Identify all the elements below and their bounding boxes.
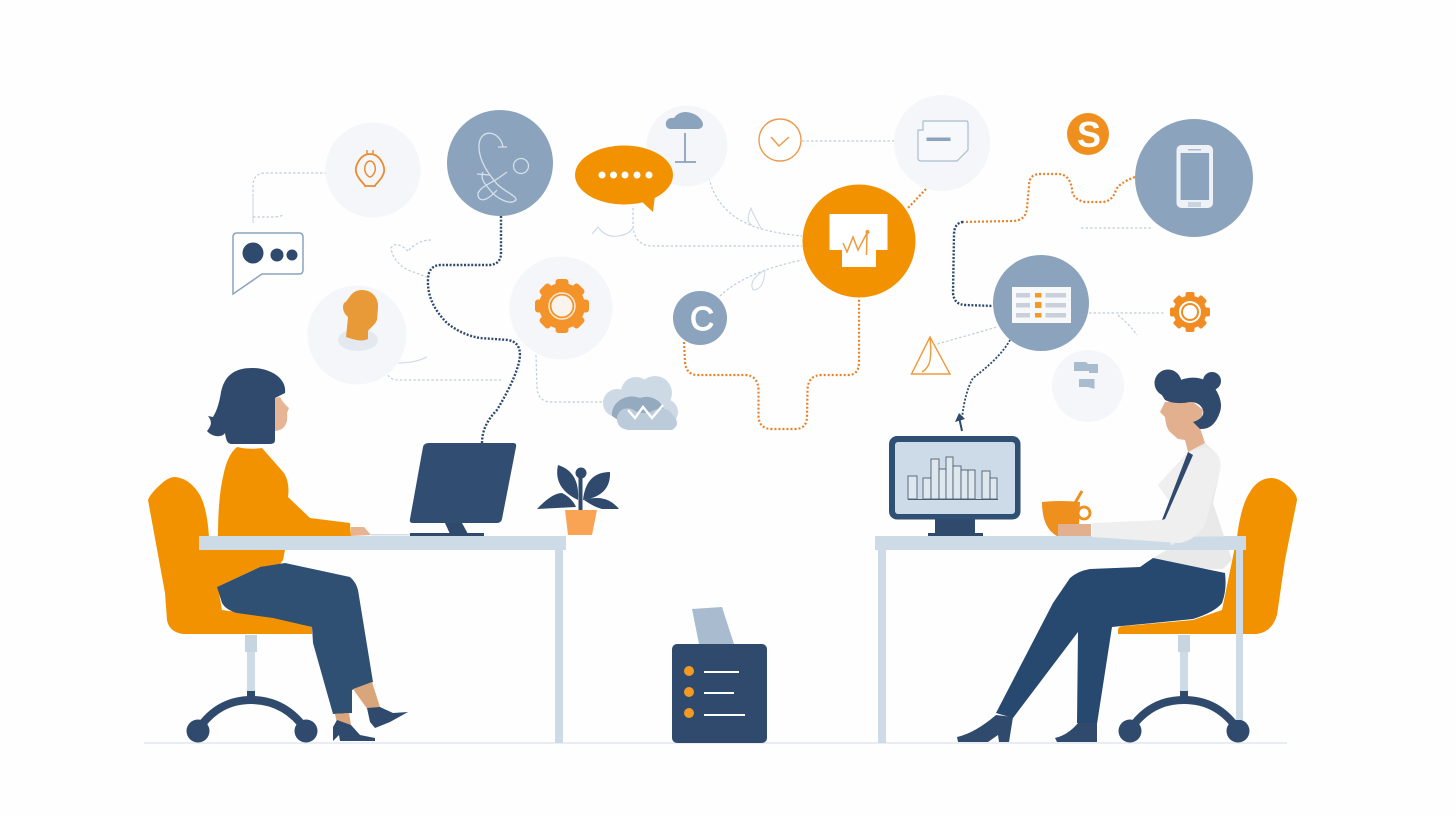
right chair	[1118, 478, 1297, 742]
icon: smartphone circle	[1135, 119, 1253, 237]
coffee cup	[1042, 491, 1090, 536]
left monitor	[371, 443, 516, 536]
icon: check circle	[759, 119, 801, 161]
right desk front edge over torso	[1150, 536, 1246, 572]
connector lines	[253, 141, 1165, 443]
icon: gear circle	[510, 256, 612, 360]
icon: cloud with zigzag	[603, 376, 678, 430]
filing cabinet	[672, 607, 767, 743]
icon: S badge: S	[1077, 114, 1101, 155]
icon: document circle	[894, 95, 990, 191]
icon: squiggle circle	[447, 110, 553, 216]
icon: orange speech bubble	[575, 146, 673, 212]
left woman	[200, 368, 408, 741]
icon: chat box	[233, 233, 303, 294]
icon: central orange chart circle	[802, 184, 916, 298]
icon: cloud circle	[646, 106, 728, 186]
icon: table circle	[993, 255, 1089, 351]
icon: flags circle	[1052, 350, 1124, 422]
icon: C circle: C	[690, 300, 714, 337]
icon: S badge	[1067, 113, 1109, 155]
right woman	[957, 370, 1232, 742]
right monitor with bar chart	[889, 436, 1020, 536]
right woman arm and tie	[1058, 447, 1220, 543]
plant	[537, 465, 619, 535]
right desk	[875, 536, 1246, 743]
icon: C circle	[673, 291, 727, 345]
icon: warning triangle	[912, 337, 950, 374]
icon: small gear	[1170, 292, 1210, 332]
icon: person circle	[308, 286, 406, 384]
arrow: up to monitor	[955, 413, 965, 431]
left chair	[148, 477, 318, 742]
icon: lightbulb circle	[326, 122, 420, 218]
left desk	[199, 536, 566, 743]
